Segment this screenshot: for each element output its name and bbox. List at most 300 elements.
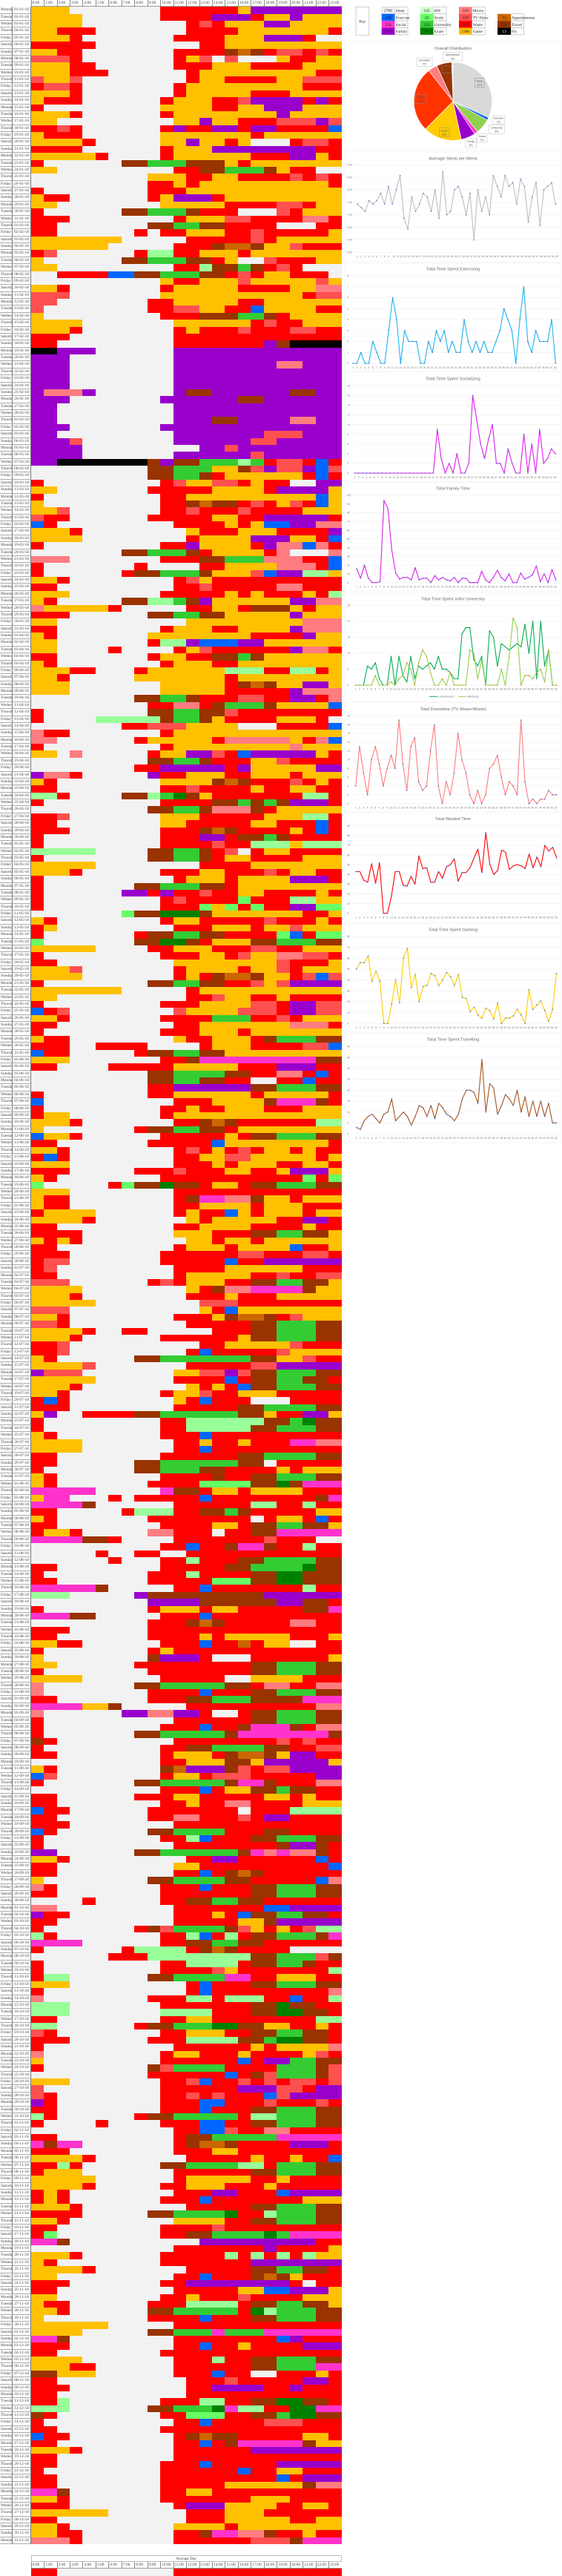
heatmap rows: one per day of 2018: 16-02-18	[14, 328, 29, 332]
x axis week labels: 1 2 3 4 5 6 7 8 9	[355, 688, 388, 691]
heatmap rows: one per day of 2018: 06-08-18	[14, 1516, 29, 1521]
pie title: Overall Distribution	[434, 47, 472, 51]
heatmap rows: one per day of 2018: 16-11-18	[14, 2225, 29, 2230]
x axis week labels: 10 11 12 13 14 15 16 17 18 19 20 21 22 23 24 25 26 27 28 29 30 31 32 33 34 35 36 37 38 39 40 41 42 43 44 45 46 47 48 49 50 51 52	[387, 366, 557, 369]
heatmap rows: one per day of 2018: Friday	[1, 1982, 11, 1987]
heatmap rows: one per day of 2018: Friday	[1, 1593, 11, 1597]
heatmap rows: one per day of 2018: 26-12-18	[14, 2503, 29, 2508]
key column: sleep, exercise, social, family: Family	[396, 30, 407, 34]
chart title: Total Time Spent Gaming	[429, 928, 477, 933]
heatmap rows: one per day of 2018: 01-09-18	[14, 1697, 29, 1701]
heatmap rows: one per day of 2018: Friday	[1, 1008, 11, 1013]
heatmap rows: one per day of 2018: 07-10-18	[14, 1947, 29, 1952]
heatmap rows: one per day of 2018: 12-06-18	[14, 1134, 29, 1138]
heatmap rows: one per day of 2018: 10-04-18	[14, 696, 29, 700]
y axis labels: 0	[347, 802, 348, 805]
heatmap hour header: 1:00	[45, 1, 53, 5]
heatmap rows: one per day of 2018: Sunday	[1, 2141, 13, 2146]
y axis labels	[347, 1046, 350, 1135]
heatmap rows: one per day of 2018: 08-09-18	[14, 1746, 29, 1750]
heatmap rows: one per day of 2018: 24-02-18	[14, 383, 29, 388]
heatmap rows: one per day of 2018: 04-03-18	[14, 439, 29, 443]
heatmap rows: one per day of 2018: 19-03-18	[14, 543, 29, 547]
heatmap rows: one per day of 2018: 19-12-18	[14, 2454, 29, 2459]
heatmap rows: one per day of 2018: Sunday	[1, 1752, 13, 1757]
heatmap rows: one per day of 2018: 22-07-18	[14, 1412, 29, 1416]
heatmap rows: one per day of 2018: Friday	[1, 2176, 11, 2181]
heatmap rows: one per day of 2018: Friday	[1, 2322, 11, 2327]
heatmap rows: one per day of 2018: 11-09-18	[14, 1766, 29, 1771]
panel: total wasted time line chart	[345, 813, 561, 922]
key column: homework, study, university, exam: Exam	[434, 30, 444, 34]
heatmap rows: one per day of 2018: 24-05-18	[14, 1002, 29, 1006]
y axis labels: 6	[347, 443, 348, 446]
key box	[356, 7, 369, 36]
y axis labels: 100	[347, 494, 351, 497]
heatmap rows: one per day of 2018: 27-12-18	[14, 2510, 29, 2514]
heatmap rows: one per day of 2018: 18-08-18	[14, 1599, 29, 1604]
heatmap rows: one per day of 2018: 13-05-18	[14, 925, 29, 930]
average day hour header: 8:00	[136, 2563, 143, 2567]
x axis week labels: 10 11 12 13 14 15 16 17 18 19 20 21 22 23 24 25 26 27 28 29 30 31 32 33 34 35 36 37 38 39 40 41 42 43 44 45 46 47 48 49 50 51 52	[392, 255, 558, 258]
key column: sleep, exercise, social, family: 100	[385, 16, 391, 20]
heatmap rows: one per day of 2018: 15-08-18	[14, 1579, 29, 1583]
y axis labels: 20	[347, 893, 350, 896]
heatmap rows: one per day of 2018: 01-05-18	[14, 842, 29, 846]
y axis labels: 70	[347, 946, 350, 949]
key column: appointments, travel, fly: 23	[502, 16, 506, 20]
heatmap rows: one per day of 2018: 27-01-18	[14, 188, 29, 193]
y axis labels: 30	[347, 883, 350, 886]
heatmap rows: one per day of 2018: 23-10-18	[14, 2058, 29, 2063]
heatmap rows: one per day of 2018: 16-06-18	[14, 1162, 29, 1166]
heatmap rows: one per day of 2018: 02-02-18	[14, 230, 29, 234]
key column: movie, tv show, waste, game: Waste	[473, 23, 483, 27]
heatmap rows: one per day of 2018: Sunday	[1, 1363, 13, 1367]
y axis labels: 15	[347, 636, 350, 639]
x axis week labels: 10 11 12 13 14 15 16 17 18 19 20 21 22 23 24 25 26 27 28 29 30 31 32 33 34 35 36 37 38 39 40 41 42 43 44 45 46 47 48 49 50 51 52	[390, 1026, 558, 1029]
heatmap rows: one per day of 2018: 14-10-18	[14, 1996, 29, 2001]
heatmap rows: one per day of 2018: 11-07-18	[14, 1335, 29, 1340]
heatmap rows: one per day of 2018: 04-08-18	[14, 1502, 29, 1507]
heatmap rows: one per day of 2018: 01-04-18	[14, 633, 29, 638]
y axis labels: 8.00	[347, 188, 352, 191]
heatmap rows: one per day of 2018: 13-12-18	[14, 2413, 29, 2417]
heatmap rows: one per day of 2018: Sunday	[1, 2044, 13, 2049]
heatmap rows: one per day of 2018: 28-12-18	[14, 2517, 29, 2522]
heatmap rows: one per day of 2018: 14-05-18	[14, 932, 29, 937]
heatmap rows: one per day of 2018: 25-04-18	[14, 800, 29, 805]
key column: homework, study, university, exam: University	[434, 23, 452, 27]
heatmap rows: one per day of 2018: 05-02-18	[14, 251, 29, 255]
y axis labels: 20	[347, 715, 350, 718]
heatmap rows: one per day of 2018: Sunday	[1, 390, 13, 394]
heatmap rows: one per day of 2018: 11-10-18	[14, 1975, 29, 1979]
heatmap rows: one per day of 2018: Friday	[1, 1739, 11, 1743]
y axis labels: 60	[347, 853, 350, 856]
pie data labels: 0%	[451, 57, 454, 60]
heatmap rows: one per day of 2018: 05-08-18	[14, 1509, 29, 1513]
pie data labels: 1%	[480, 139, 484, 142]
heatmap rows: one per day of 2018: 11-03-18	[14, 487, 29, 492]
heatmap rows: one per day of 2018: Sunday	[1, 1558, 13, 1562]
key column: sleep, exercise, social, family: 124	[385, 23, 391, 27]
heatmap rows: one per day of 2018: 27-07-18	[14, 1447, 29, 1451]
key column: homework, study, university, exam: Study	[434, 16, 444, 20]
heatmap rows: one per day of 2018: 03-12-18	[14, 2343, 29, 2348]
heatmap rows: one per day of 2018: 26-05-18	[14, 1016, 29, 1020]
heatmap hour header: 7:00	[123, 1, 130, 5]
heatmap hour header: 12:00	[188, 1, 196, 5]
key column: homework, study, university, exam: 352	[423, 23, 430, 27]
heatmap rows: one per day of 2018: Friday	[1, 84, 11, 88]
heatmap rows: one per day of 2018: 13-11-18	[14, 2205, 29, 2209]
heatmap rows: one per day of 2018: 25-08-18	[14, 1648, 29, 1653]
heatmap hour header: 22:00	[317, 1, 326, 5]
y axis labels: 70	[347, 521, 350, 524]
heatmap rows: one per day of 2018: 16-01-18	[14, 112, 29, 116]
heatmap rows: one per day of 2018: 18-07-18	[14, 1384, 29, 1389]
heatmap rows: one per day of 2018: Sunday	[1, 1218, 13, 1222]
heatmap rows: one per day of 2018: 24-06-18	[14, 1218, 29, 1222]
heatmap rows: one per day of 2018: Sunday	[1, 828, 13, 833]
heatmap rows: one per day of 2018: 21-03-18	[14, 557, 29, 561]
average day title	[31, 2555, 342, 2562]
heatmap rows: one per day of 2018: Friday	[1, 1350, 11, 1354]
heatmap rows: one per day of 2018: Friday	[1, 911, 11, 916]
heatmap rows: one per day of 2018: Sunday	[1, 1996, 13, 2001]
heatmap hour header: 21:00	[304, 1, 313, 5]
average day hour header: 10:00	[162, 2563, 171, 2567]
heatmap rows: one per day of 2018: 17-09-18	[14, 1808, 29, 1812]
heatmap rows: one per day of 2018: 23-08-18	[14, 1634, 29, 1639]
heatmap rows: one per day of 2018: 03-09-18	[14, 1711, 29, 1715]
heatmap rows: one per day of 2018: 16-03-18	[14, 522, 29, 526]
y axis labels: 90	[347, 503, 350, 506]
pie slices	[414, 62, 492, 140]
y axis labels: 50	[347, 538, 350, 541]
heatmap rows: one per day of 2018: 10-01-18	[14, 70, 29, 75]
y axis labels: 15	[347, 1100, 350, 1103]
heatmap rows: one per day of 2018: 20-12-18	[14, 2462, 29, 2466]
heatmap rows: one per day of 2018: 26-03-18	[14, 592, 29, 596]
average day hour header: 0:00	[33, 2563, 39, 2567]
heatmap rows: one per day of 2018: 09-03-18	[14, 473, 29, 478]
heatmap rows: one per day of 2018: 25-12-18	[14, 2497, 29, 2501]
heatmap rows: one per day of 2018: 16-04-18	[14, 738, 29, 742]
heatmap rows: one per day of 2018: 29-05-18	[14, 1037, 29, 1041]
pie data labels: 6%	[495, 131, 498, 133]
x axis week labels: 10 11 12 13 14 15 16 17 18 19 20 21 22 23 24 25 26 27 28 29 30 31 32 33 34 35 36 37 38 39 40 41 42 43 44 45 46 47 48 49 50 51 52	[390, 807, 558, 810]
pie data labels	[415, 52, 505, 148]
average day hour header: 20:00	[291, 2563, 300, 2567]
heatmap rows: one per day of 2018: Sunday	[1, 293, 13, 297]
heatmap rows: one per day of 2018: 02-05-18	[14, 849, 29, 853]
heatmap rows: one per day of 2018: Sunday	[1, 1315, 13, 1319]
heatmap rows: one per day of 2018: 08-01-18	[14, 56, 29, 61]
heatmap rows: one per day of 2018: Sunday	[1, 1120, 13, 1124]
heatmap rows: one per day of 2018: Sunday	[1, 2531, 13, 2535]
pie data labels: 1%	[497, 120, 500, 123]
heatmap rows: one per day of 2018: 22-04-18	[14, 779, 29, 784]
heatmap rows: one per day of 2018: 02-04-18	[14, 640, 29, 644]
heatmap rows: one per day of 2018: 26-04-18	[14, 807, 29, 811]
average day hour header	[31, 2562, 342, 2569]
heatmap rows: one per day of 2018: 24-12-18	[14, 2489, 29, 2494]
heatmap rows: one per day of 2018: 13-01-18	[14, 91, 29, 96]
heatmap rows: one per day of 2018: Sunday	[1, 2190, 13, 2195]
heatmap rows: one per day of 2018: 01-10-18	[14, 1906, 29, 1910]
heatmap rows: one per day of 2018: 25-05-18	[14, 1008, 29, 1013]
y axis labels: 0	[347, 581, 348, 584]
key column: appointments, travel, fly: Travel	[512, 23, 523, 27]
y axis labels: 0	[347, 1022, 348, 1025]
heatmap rows: one per day of 2018: 11-11-18	[14, 2190, 29, 2195]
pie data labels: 32%	[477, 83, 482, 86]
heatmap rows: one per day of 2018: 11-05-18	[14, 911, 29, 916]
heatmap rows: one per day of 2018: 09-01-18	[14, 63, 29, 67]
y axis labels: 1	[347, 351, 348, 354]
key column: homework, study, university, exam: 31	[425, 30, 429, 34]
heatmap rows: one per day of 2018: 30-01-18	[14, 209, 29, 214]
heatmap rows: one per day of 2018: 08-02-18	[14, 272, 29, 277]
key column: movie, tv show, waste, game: TV Show	[473, 16, 489, 20]
heatmap rows: one per day of 2018: 20-01-18	[14, 139, 29, 144]
average day hour header: 13:00	[201, 2563, 210, 2567]
heatmap rows: one per day of 2018: Friday	[1, 328, 11, 332]
heatmap rows: one per day of 2018: 12-02-18	[14, 300, 29, 304]
heatmap rows: one per day of 2018: 18-10-18	[14, 2024, 29, 2028]
heatmap rows: one per day of 2018: 13-02-18	[14, 306, 29, 311]
heatmap rows: one per day of 2018: 18-11-18	[14, 2239, 29, 2244]
heatmap rows: one per day of 2018: Friday	[1, 1203, 11, 1208]
heatmap rows: one per day of 2018: 10-12-18	[14, 2392, 29, 2397]
average day hour header: 21:00	[304, 2563, 313, 2567]
heatmap rows: one per day of 2018: 03-05-18	[14, 856, 29, 860]
heatmap rows: one per day of 2018: Friday	[1, 1398, 11, 1402]
heatmap rows: one per day of 2018: Sunday	[1, 487, 13, 492]
heatmap rows: one per day of 2018: 17-07-18	[14, 1377, 29, 1381]
heatmap rows: one per day of 2018: 19-11-18	[14, 2246, 29, 2250]
heatmap rows: one per day of 2018: 23-12-18	[14, 2483, 29, 2487]
pie data labels: 4%	[423, 63, 426, 66]
y axis labels: 18	[347, 384, 350, 387]
heatmap rows: one per day of 2018: 23-07-18	[14, 1419, 29, 1423]
heatmap rows: one per day of 2018: 12-09-18	[14, 1774, 29, 1778]
pie data labels: 6%	[469, 144, 472, 147]
heatmap rows: one per day of 2018: 03-03-18	[14, 432, 29, 436]
y axis labels: 25	[347, 1078, 350, 1081]
heatmap rows: one per day of 2018: Friday	[1, 36, 11, 40]
y axis labels: 10	[347, 1111, 350, 1114]
heatmap hour header: 8:00	[136, 1, 143, 5]
heatmap rows: one per day of 2018: 08-12-18	[14, 2378, 29, 2382]
y axis labels: 3	[347, 329, 348, 332]
heatmap rows: one per day of 2018: 10-02-18	[14, 285, 29, 290]
heatmap rows: one per day of 2018: Friday	[1, 473, 11, 478]
heatmap rows: one per day of 2018: 07-06-18	[14, 1099, 29, 1103]
heatmap rows: one per day of 2018: 20-11-18	[14, 2253, 29, 2257]
key column: appointments, travel, fly: 13	[502, 30, 506, 34]
key column: homework, study, university, exam: 20	[425, 16, 429, 20]
heatmap rows: one per day of 2018: 18-05-18	[14, 960, 29, 965]
chart title: Total Time Spent Travelling	[427, 1038, 479, 1043]
heatmap rows: one per day of 2018: Friday	[1, 522, 11, 526]
chart legend: Lecture/Exam	[438, 696, 454, 699]
heatmap rows: one per day of 2018: 29-08-18	[14, 1676, 29, 1680]
heatmap hour header: 11:00	[175, 1, 184, 5]
panel: overall distribution pie chart	[345, 42, 561, 150]
heatmap rows: one per day of 2018: Sunday	[1, 439, 13, 443]
heatmap hour header: 2:00	[59, 1, 65, 5]
heatmap rows: one per day of 2018: 01-07-18	[14, 1266, 29, 1270]
pie data labels: Sleep	[476, 80, 483, 83]
heatmap rows: one per day of 2018: 28-09-18	[14, 1885, 29, 1889]
heatmap rows: one per day of 2018: Sunday	[1, 1023, 13, 1027]
heatmap rows: one per day of 2018: 28-10-18	[14, 2093, 29, 2098]
heatmap rows: one per day of 2018: 02-08-18	[14, 1488, 29, 1493]
heatmap rows: one per day of 2018: 27-09-18	[14, 1877, 29, 1882]
heatmap hour header: 9:00	[149, 1, 156, 5]
chart title: Average Sleep per Week	[429, 157, 477, 162]
key column: movie, tv show, waste, game: 1386	[461, 30, 470, 34]
heatmap rows: one per day of 2018: 20-10-18	[14, 2038, 29, 2042]
heatmap rows: one per day of 2018: 23-01-18	[14, 161, 29, 165]
heatmap rows: one per day of 2018: 11-04-18	[14, 703, 29, 707]
heatmap rows: one per day of 2018: 21-12-18	[14, 2468, 29, 2473]
x axis week labels: 1 2 3 4 5 6 7 8 9	[356, 1137, 389, 1140]
y axis labels: 5.50	[347, 251, 352, 254]
x axis week labels: 1 2 3 4 5 6 7 8 9	[357, 255, 389, 258]
heatmap rows: one per day of 2018: 06-06-18	[14, 1092, 29, 1097]
heatmap rows: one per day of 2018: 16-12-18	[14, 2434, 29, 2438]
heatmap rows: one per day of 2018: 28-08-18	[14, 1669, 29, 1674]
heatmap rows: one per day of 2018: 02-12-18	[14, 2336, 29, 2341]
average day hour header: 19:00	[278, 2563, 288, 2567]
heatmap rows: one per day of 2018: 20-02-18	[14, 355, 29, 360]
y axis labels: 50	[347, 968, 350, 971]
heatmap rows: one per day of 2018: Friday	[1, 1447, 11, 1451]
panel: total time spent exercising line chart	[345, 263, 561, 371]
heatmap rows: one per day of 2018: 26-01-18	[14, 182, 29, 186]
heatmap rows: one per day of 2018: Sunday	[1, 925, 13, 930]
heatmap rows: one per day of 2018: 30-03-18	[14, 619, 29, 624]
heatmap rows: one per day of 2018: 11-12-18	[14, 2399, 29, 2403]
heatmap rows: one per day of 2018: 21-11-18	[14, 2260, 29, 2265]
heatmap rows: one per day of 2018: 10-11-18	[14, 2184, 29, 2188]
y axis labels: 90	[347, 825, 350, 828]
heatmap rows: one per day of 2018: 09-12-18	[14, 2385, 29, 2390]
key column: homework, study, university, exam	[420, 7, 452, 35]
heatmap rows: one per day of 2018: 10-03-18	[14, 480, 29, 485]
line: wasted time	[356, 833, 557, 914]
heatmap rows: one per day of 2018: 06-02-18	[14, 258, 29, 262]
heatmap rows: one per day of 2018: 29-06-18	[14, 1252, 29, 1256]
heatmap rows: one per day of 2018: 26-02-18	[14, 397, 29, 401]
y axis labels: 8	[347, 433, 348, 436]
heatmap rows: one per day of 2018: 28-04-18	[14, 821, 29, 825]
heatmap rows: one per day of 2018: 20-06-18	[14, 1189, 29, 1194]
line: homework and study	[356, 618, 557, 685]
key column: sleep, exercise, social, family	[382, 7, 410, 35]
heatmap rows: one per day of 2018: 15-12-18	[14, 2427, 29, 2431]
heatmap rows: one per day of 2018: 09-08-18	[14, 1537, 29, 1542]
y axis labels: 6	[347, 297, 348, 300]
heatmap rows: one per day of 2018: 02-09-18	[14, 1704, 29, 1708]
heatmap rows: one per day of 2018: 24-01-18	[14, 168, 29, 172]
key column: appointments, travel, fly: 550	[501, 23, 507, 27]
heatmap rows: one per day of 2018: Friday	[1, 1252, 11, 1256]
average day hour header: 17:00	[252, 2563, 262, 2567]
heatmap rows: one per day of 2018: 07-07-18	[14, 1307, 29, 1312]
chart title: Total Time Spent Socializing	[426, 377, 480, 381]
heatmap rows: one per day of 2018: Sunday	[1, 1266, 13, 1270]
heatmap rows: one per day of 2018: 31-05-18	[14, 1051, 29, 1055]
x axis week labels: 10 11 12 13 14 15 16 17 18 19 20 21 22 23 24 25 26 27 28 29 30 31 32 33 34 35 36 37 38 39 40 41 42 43 44 45 46 47 48 49 50 51 52	[390, 1137, 558, 1140]
heatmap rows: one per day of 2018: Friday	[1, 1544, 11, 1548]
heatmap rows: one per day of 2018: 23-02-18	[14, 376, 29, 380]
heatmap rows: one per day of 2018: 09-04-18	[14, 689, 29, 693]
heatmap rows: one per day of 2018: Sunday	[1, 1169, 13, 1173]
heatmap rows: one per day of 2018: 21-02-18	[14, 362, 29, 366]
heatmap rows: one per day of 2018: 07-12-18	[14, 2371, 29, 2376]
average day hour header: 5:00	[97, 2563, 105, 2567]
heatmap rows: one per day of 2018: Friday	[1, 668, 11, 673]
heatmap rows: one per day of 2018: 23-06-18	[14, 1210, 29, 1215]
average day hour header: 9:00	[149, 2563, 156, 2567]
heatmap hour header: 23:00	[330, 1, 339, 5]
heatmap rows: one per day of 2018: Sunday	[1, 1461, 13, 1465]
heatmap rows: one per day of 2018: 05-06-18	[14, 1085, 29, 1089]
heatmap hour header: 13:00	[201, 1, 210, 5]
heatmap rows: one per day of 2018: 15-11-18	[14, 2219, 29, 2223]
heatmap rows: one per day of 2018: Friday	[1, 862, 11, 867]
y axis labels: 40	[347, 873, 350, 876]
y axis labels	[347, 935, 350, 1025]
heatmap rows: one per day of 2018: 12-05-18	[14, 918, 29, 922]
heatmap rows: one per day of 2018: 07-03-18	[14, 460, 29, 464]
heatmap rows: one per day of 2018: Friday	[1, 2225, 11, 2230]
y axis labels: 60	[347, 529, 350, 532]
panel: year heatmap of hours by day	[0, 0, 342, 2576]
heatmap rows: one per day of 2018: 31-10-18	[14, 2114, 29, 2118]
heatmap rows: one per day of 2018: 20-07-18	[14, 1398, 29, 1402]
heatmap rows: one per day of 2018: 06-09-18	[14, 1731, 29, 1736]
heatmap rows: one per day of 2018: 19-07-18	[14, 1391, 29, 1396]
x axis week labels: 10 11 12 13 14 15 16 17 18 19 20 21 22 23 24 25 26 27 28 29 30 31 32 33 34 35 36 37 38 39 40 41 42 43 44 45 46 47 48 49 50 51 52	[390, 586, 557, 589]
y axis labels	[347, 494, 351, 584]
heatmap rows: one per day of 2018: Friday	[1, 717, 11, 721]
heatmap rows: one per day of 2018: 21-09-18	[14, 1836, 29, 1840]
heatmap rows: one per day of 2018: Friday	[1, 2371, 11, 2376]
y axis labels: 8	[347, 274, 348, 277]
heatmap rows: one per day of 2018: Sunday	[1, 341, 13, 346]
heatmap rows: one per day of 2018: 22-08-18	[14, 1628, 29, 1632]
y axis labels: 0	[347, 362, 348, 365]
heatmap rows: one per day of 2018: 10-08-18	[14, 1544, 29, 1548]
heatmap hour header: 0:00	[33, 1, 39, 5]
heatmap rows: one per day of 2018: 15-02-18	[14, 320, 29, 325]
heatmap rows: one per day of 2018: Friday	[1, 571, 11, 575]
average day hour header: 4:00	[84, 2563, 91, 2567]
heatmap rows: one per day of 2018: Sunday	[1, 2288, 13, 2292]
heatmap rows: one per day of 2018: 26-10-18	[14, 2079, 29, 2084]
heatmap rows: one per day of 2018: 23-09-18	[14, 1850, 29, 1855]
heatmap rows: one per day of 2018: 08-04-18	[14, 682, 29, 687]
heatmap rows: one per day of 2018: 23-05-18	[14, 995, 29, 1000]
line: family	[357, 501, 556, 583]
y axis labels: 20	[347, 1000, 350, 1003]
